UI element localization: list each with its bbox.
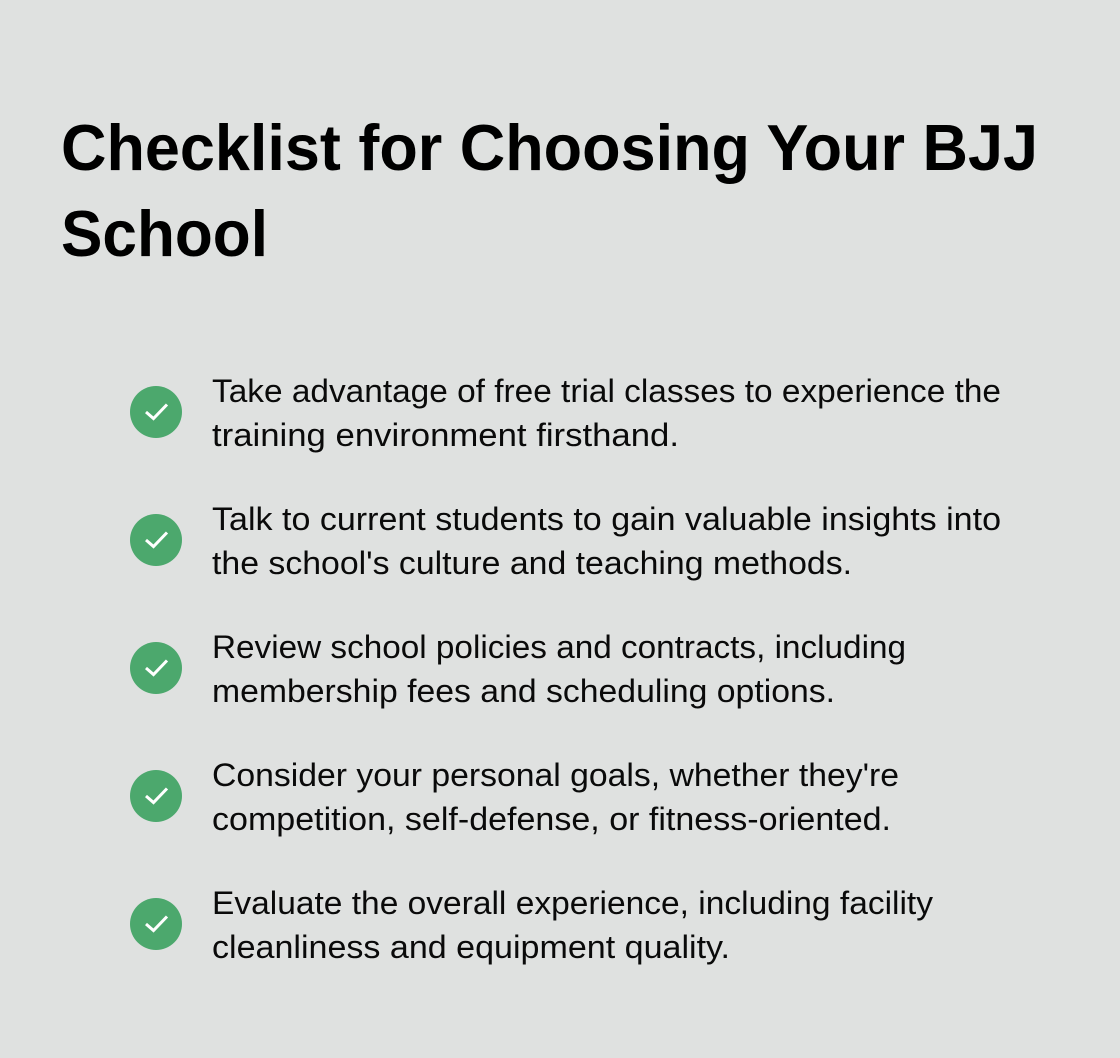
item 4: Consider your personal goals, whether they're xyxy=(212,757,899,793)
item 5: Evaluate the overall experience, including facility xyxy=(212,885,933,921)
checklist xyxy=(130,373,1001,965)
item 2 xyxy=(130,501,1001,581)
item 2: Talk to current students to gain valuable insights into xyxy=(212,501,1001,537)
item 5 xyxy=(130,885,933,965)
title xyxy=(61,111,1038,270)
item 2: the school's culture and teaching methods. xyxy=(212,545,852,581)
title: Checklist for Choosing Your BJJ xyxy=(61,111,1038,184)
item 1 xyxy=(130,373,1001,453)
item 1: training environment firsthand. xyxy=(212,417,679,453)
item 3 xyxy=(130,629,906,709)
item 3: membership fees and scheduling options. xyxy=(212,673,835,709)
item 5: cleanliness and equipment quality. xyxy=(212,929,730,965)
item 1: Take advantage of free trial classes to experience the xyxy=(212,373,1001,409)
item 3: Review school policies and contracts, including xyxy=(212,629,906,665)
title: School xyxy=(61,197,268,270)
item 4: competition, self-defense, or fitness-oriented. xyxy=(212,801,891,837)
item 4 xyxy=(130,757,899,837)
